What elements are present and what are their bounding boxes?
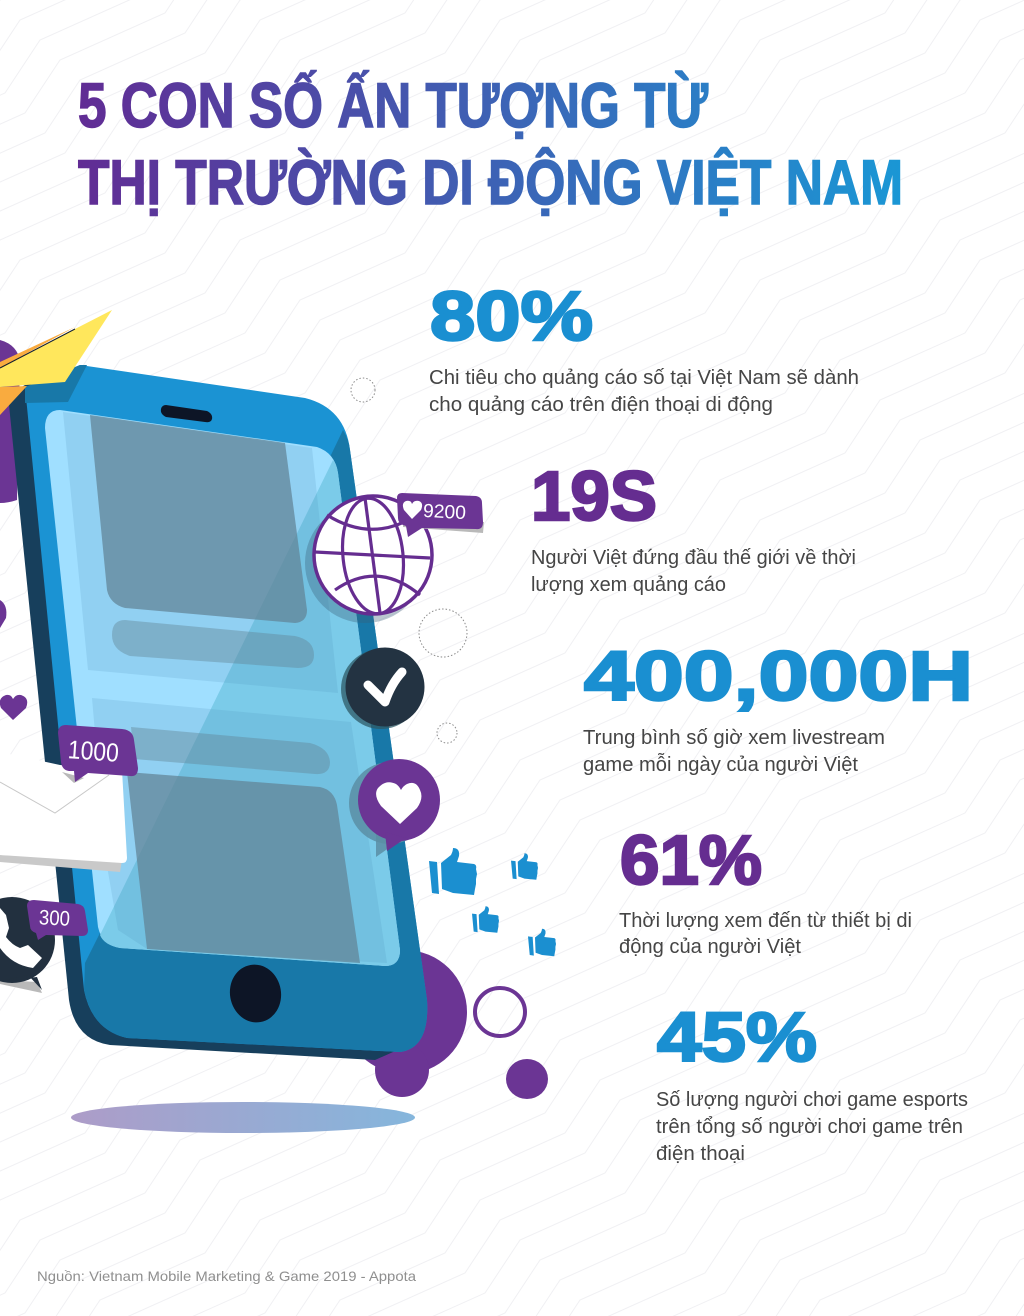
stat: 80%	[429, 277, 859, 416]
stat: 400,000H: 400,000H	[584, 637, 973, 715]
stat: 400,000H: game mỗi ngày của người Việt	[583, 753, 858, 776]
stat: 19S: lượng xem quảng cáo	[531, 574, 726, 596]
title	[78, 70, 903, 218]
badge: 9200: 9200	[422, 501, 466, 524]
stat: 80%: Chi tiêu cho quảng cáo số tại Việt Nam sẽ dành	[429, 367, 859, 389]
envelope	[0, 752, 127, 872]
stat: 61%: động của người Việt	[619, 936, 801, 958]
floor shadow	[71, 1102, 415, 1133]
badge: 9200	[397, 493, 484, 537]
screen box 1	[90, 415, 307, 623]
stat: 45%: trên tổng số người chơi game trên	[656, 1116, 963, 1138]
stat: 80%: 80%	[430, 277, 593, 355]
stat: 45%: Số lượng người chơi game esports	[656, 1089, 968, 1111]
stat: 61%: 61%	[620, 821, 762, 899]
purple blobs behind phone	[0, 340, 548, 1099]
stat: 61%: Thời lượng xem đến từ thiết bị di	[619, 910, 912, 932]
screen pill 2	[131, 727, 330, 774]
hearts on the left	[0, 600, 27, 720]
stat: 19S: Người Việt đứng đầu thế giới về thời	[531, 547, 856, 569]
stat: 45%: điện thoại	[656, 1143, 745, 1165]
source note: Nguồn: Vietnam Mobile Marketing & Game 2019 - Appota	[37, 1268, 416, 1284]
icon: check	[341, 648, 424, 729]
stat: 19S	[531, 457, 856, 596]
screen	[45, 410, 400, 966]
speaker	[161, 405, 212, 422]
home button	[225, 961, 286, 1026]
stat: 61%	[619, 821, 912, 958]
stat: 19S: 19S	[531, 457, 657, 535]
stat: 400,000H	[583, 637, 973, 776]
title: 5 CON SỐ ẤN TƯỢNG TỪ	[78, 70, 709, 141]
stat: 45%: 45%	[657, 998, 817, 1076]
icon: phone chat bubble	[0, 897, 55, 993]
badge: 300	[27, 900, 88, 940]
icon: globe	[305, 495, 432, 623]
screen stripes	[63, 412, 338, 693]
stat: 400,000H: Trung bình số giờ xem livestream	[583, 727, 885, 749]
stat: 45%	[656, 998, 968, 1165]
icon: heart bubble	[349, 759, 440, 857]
paper plane	[0, 310, 112, 415]
stat: 80%: cho quảng cáo trên điện thoại di động	[429, 394, 773, 416]
badge: 1000	[58, 725, 138, 783]
dotted circles	[351, 378, 467, 743]
badge: 300: 300	[38, 906, 71, 931]
badge: 1000: 1000	[67, 734, 120, 768]
icons: thumbs up	[429, 848, 556, 956]
screen box 2	[127, 772, 360, 963]
purple ring	[475, 988, 525, 1036]
illustration: phone with social icons	[0, 310, 556, 1133]
screen pill 1	[112, 620, 314, 668]
phone body	[8, 365, 427, 1060]
